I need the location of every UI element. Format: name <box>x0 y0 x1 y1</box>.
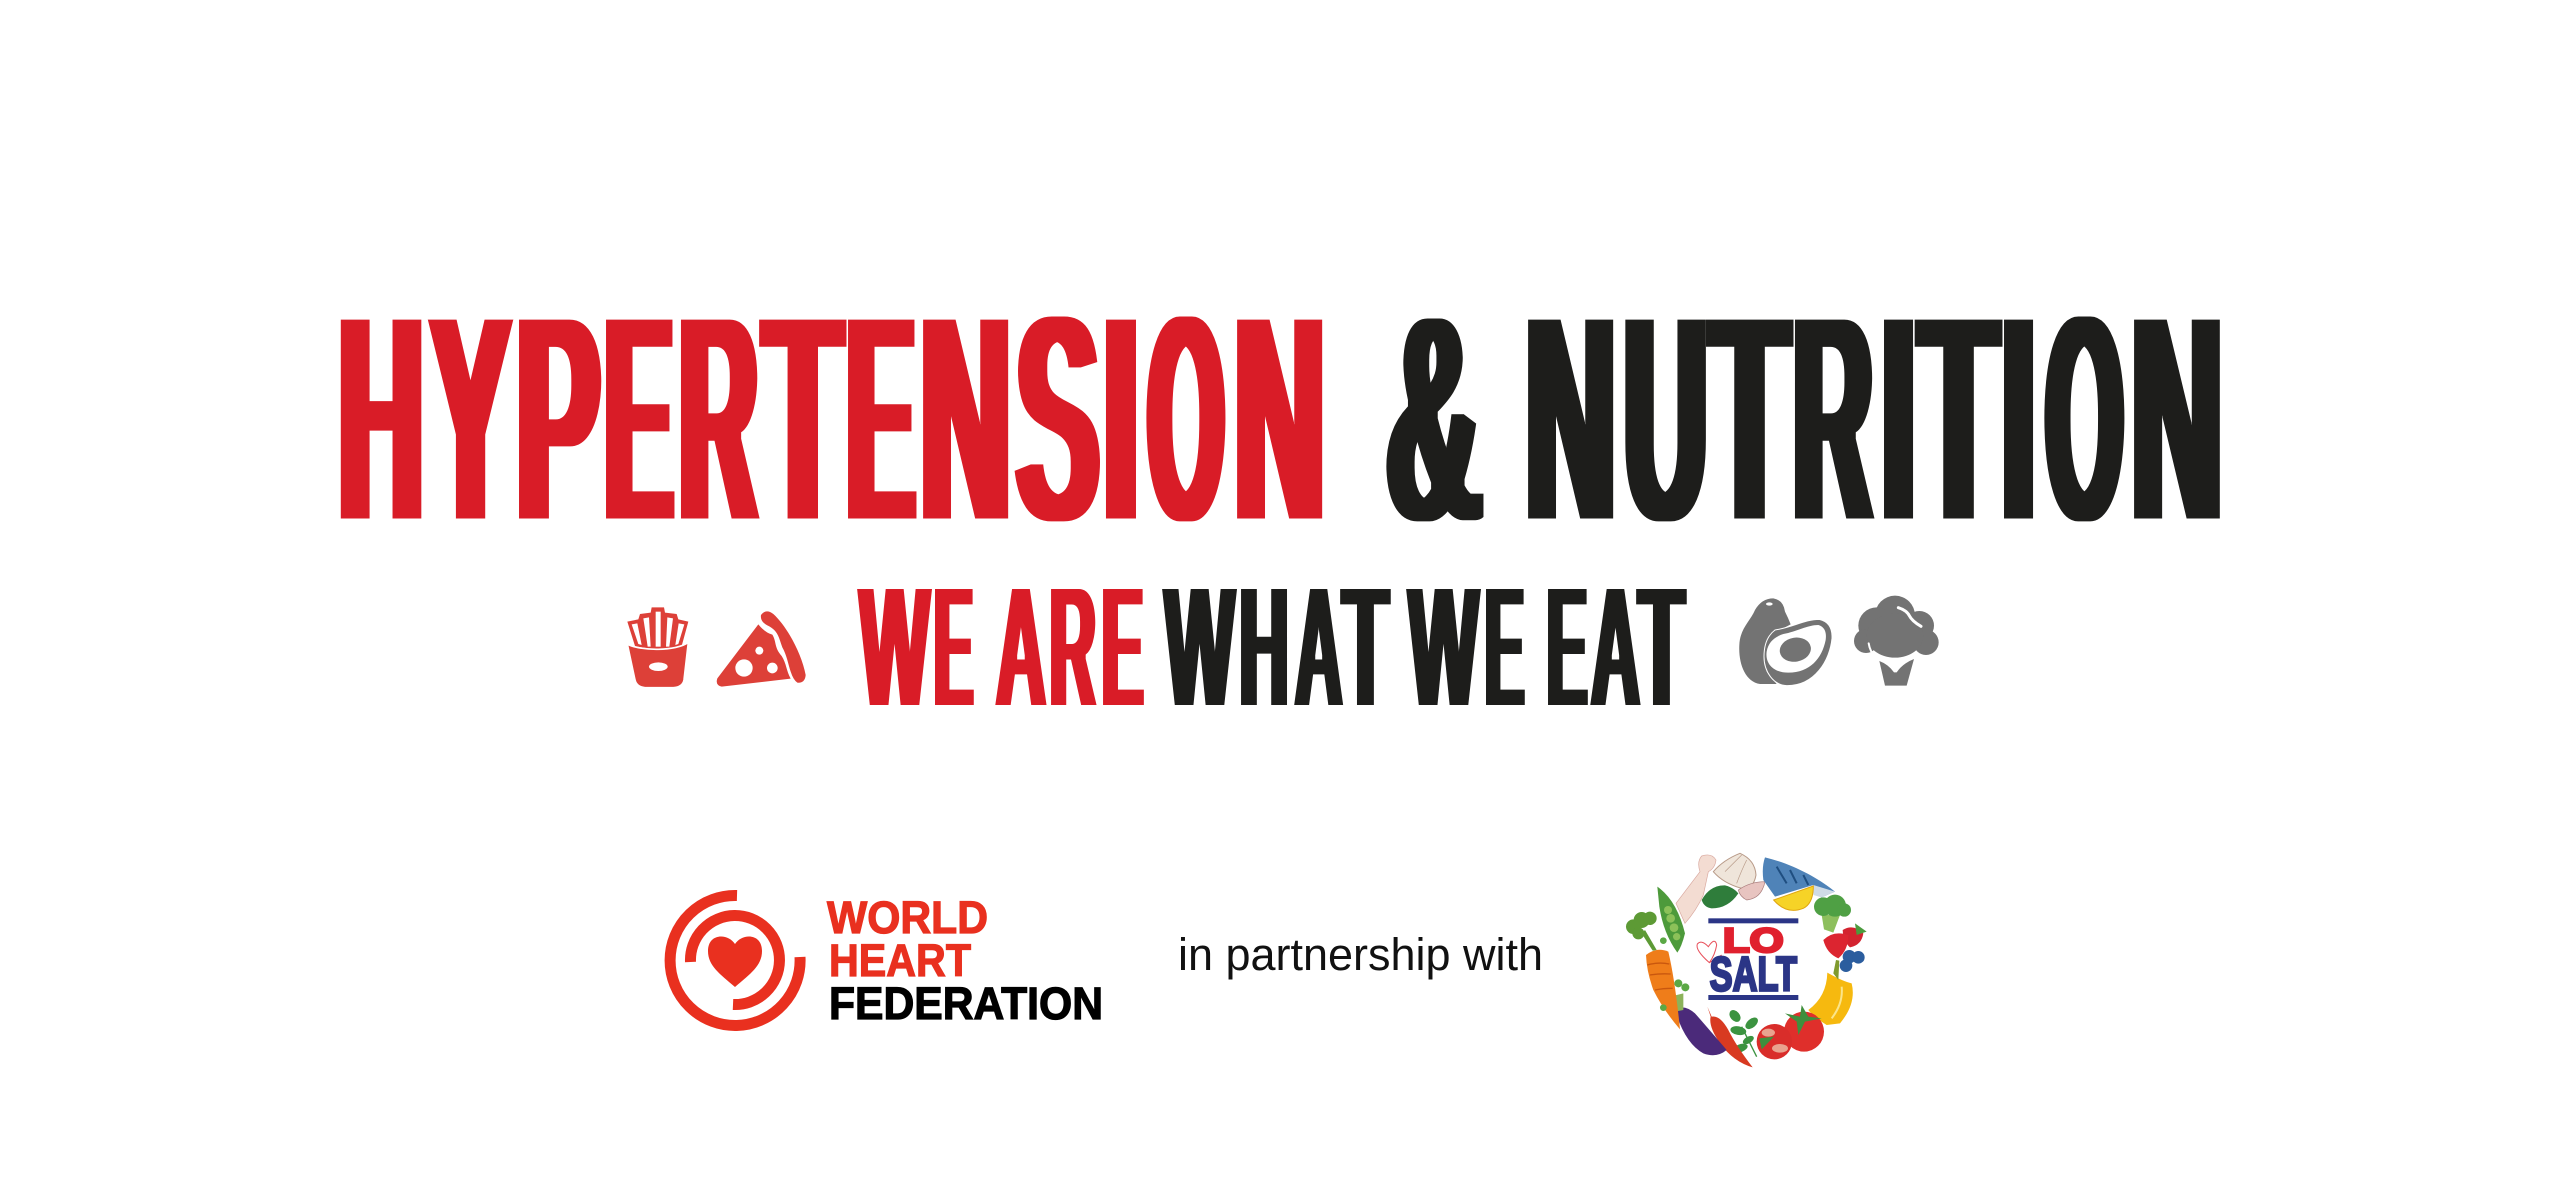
title: hypertension <box>339 252 1325 586</box>
logo: lo salt <box>1626 853 1867 1067</box>
carrot leaves <box>1626 912 1657 951</box>
title: and nutrition: R <box>1794 252 1872 585</box>
icon: fries <box>627 607 688 688</box>
broccoli <box>1814 895 1851 933</box>
subtitle: what we eat: T <box>1638 550 1685 745</box>
lemon <box>1774 886 1813 910</box>
title: hypertension: S <box>1016 254 1099 585</box>
subtitle: what we eat: T <box>1342 550 1389 745</box>
pea pod <box>1657 887 1685 953</box>
subtitle: what we eat <box>1165 549 1685 745</box>
title: and nutrition: U <box>1624 252 1707 585</box>
title: hypertension: I <box>1104 253 1138 585</box>
icon: pizza slice <box>717 611 806 687</box>
subtitle: what we eat: A <box>1591 550 1640 745</box>
subtitle: we are: E <box>1102 550 1143 744</box>
subtitle: we are: E <box>934 549 973 745</box>
title: and nutrition: & <box>1386 252 1482 585</box>
subtitle: what we eat: W <box>1165 551 1235 745</box>
title: and nutrition: I <box>1882 253 1915 586</box>
title: hypertension: T <box>764 253 842 585</box>
title: hypertension: N <box>1235 253 1325 585</box>
tomato <box>1784 1005 1824 1052</box>
title: and nutrition: O <box>2046 251 2123 585</box>
subtitle: what we eat: A <box>1295 550 1342 744</box>
title: hypertension: N <box>921 253 1011 585</box>
strawberries <box>1823 923 1867 958</box>
brand SALT: SALT <box>1710 948 1797 1001</box>
subtitle: what we eat: E <box>1485 549 1524 745</box>
basil leaf <box>1702 885 1738 908</box>
title: hypertension: Y <box>430 253 511 586</box>
yellow pepper <box>1808 960 1853 1025</box>
logo: world heart federation <box>670 892 1103 1029</box>
title: and nutrition <box>1386 251 2222 586</box>
brand bars <box>1708 918 1798 1000</box>
title: and nutrition: N <box>1526 253 1616 585</box>
chicken drumstick <box>1676 855 1716 923</box>
subtitle: we are: R <box>1050 549 1096 744</box>
subtitle: we are: A <box>996 551 1046 745</box>
title: and nutrition: T <box>1710 252 1789 585</box>
fish <box>1763 857 1835 897</box>
title: and nutrition: I <box>2002 253 2035 586</box>
subtitle: what we eat: W <box>1409 551 1479 745</box>
title: hypertension: P <box>517 253 600 585</box>
loose peas <box>1660 937 1689 1011</box>
icon: avocado <box>1739 598 1832 686</box>
title: hypertension: E <box>605 254 672 586</box>
subtitle: what we eat: H <box>1240 550 1289 745</box>
subtitle: we are <box>860 549 1143 745</box>
carrot <box>1646 950 1680 1029</box>
title: hypertension: E <box>847 254 914 586</box>
title: hypertension: O <box>1148 252 1224 585</box>
wordmark: FEDERATION <box>829 978 1103 1029</box>
wordmark: HEART <box>829 935 971 986</box>
subtitle: we are: W <box>860 551 930 745</box>
subtitle: what we eat: E <box>1547 549 1587 744</box>
blueberries <box>1840 950 1865 972</box>
tomato half <box>1757 1024 1792 1059</box>
title: and nutrition: T <box>1919 252 1998 585</box>
chili <box>1707 1007 1753 1067</box>
eggplant <box>1670 993 1727 1055</box>
garlic <box>1713 853 1765 900</box>
heart line <box>1697 941 1722 963</box>
wordmark: WORLD <box>827 892 988 943</box>
title: hypertension: H <box>339 252 423 585</box>
icon: broccoli <box>1854 596 1939 686</box>
brand LO: LO <box>1723 922 1784 960</box>
wordmark <box>827 892 1103 1029</box>
title: and nutrition: N <box>2132 253 2222 585</box>
title: hypertension: R <box>680 253 757 585</box>
parsley <box>1727 1008 1760 1057</box>
icon: heart rings <box>670 895 800 1025</box>
text: in partnership with: in partnership with <box>1178 929 1543 980</box>
